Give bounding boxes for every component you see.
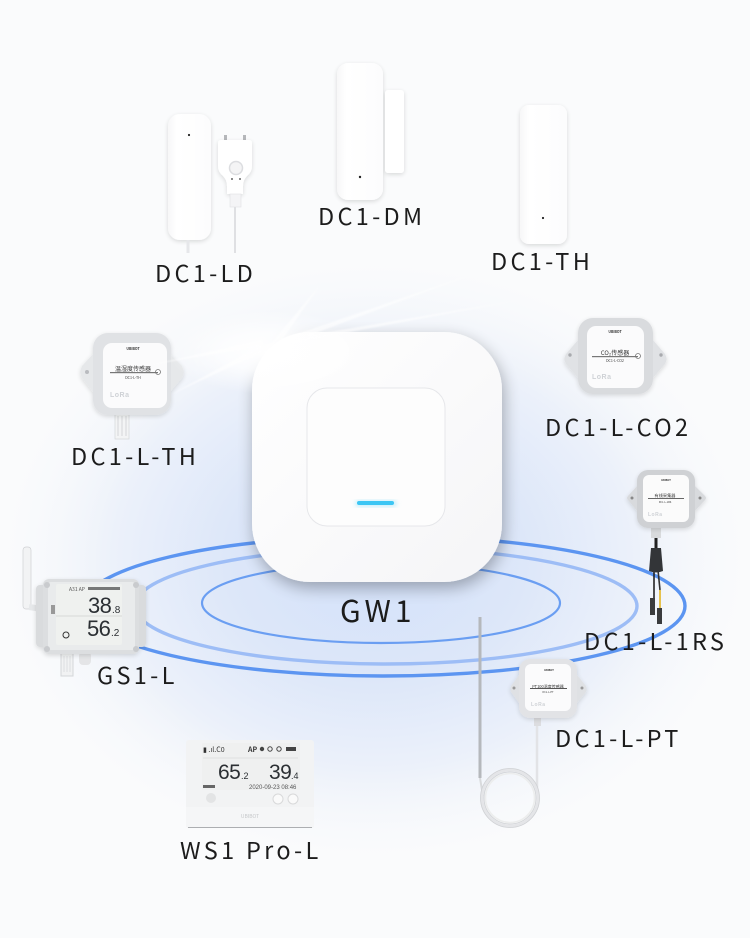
status LEDs: [355, 500, 397, 507]
label: WS1 Pro-L: WS1 Pro-L: [180, 832, 322, 866]
sensor body: [168, 114, 211, 240]
device: WS1 Pro-L: UBIBOT: [241, 813, 259, 820]
label: DC1-LD: DC1-LD: [155, 255, 256, 289]
device: DC1-DM door sensor: [337, 63, 404, 200]
device: DC1-L-CO2: CO₂传感器: [601, 348, 629, 357]
label: DC1-DM: DC1-DM: [318, 198, 425, 232]
cables: [649, 536, 663, 624]
label: GW1: GW1: [340, 587, 416, 631]
device: GS1-L: [23, 547, 146, 676]
device: GS1-L: .2: [111, 628, 120, 639]
device: WS1 Pro-L: [186, 740, 314, 828]
device: DC1-L-CO2: UBIBOT: [608, 330, 622, 335]
label: DC1-L-CO2: DC1-L-CO2: [545, 409, 691, 443]
device: DC1-L-1RS: DC1-L-1RS: [659, 500, 672, 504]
probe with cable: [188, 135, 252, 253]
device: GS1-L: A31 AP: [69, 586, 85, 593]
label: DC1-L-1RS: DC1-L-1RS: [584, 623, 727, 657]
device: DC1-L-1RS: 有线采集器: [655, 492, 676, 499]
device: WS1 Pro-L: 2020-09-23 08:46: [249, 785, 297, 791]
antenna: [23, 547, 42, 609]
gateway body: [252, 332, 502, 582]
signal rings: [83, 536, 685, 676]
device: DC1-L-CO2: [564, 318, 666, 394]
device: DC1-L-PT: DC1-L-PT: [542, 690, 554, 694]
device: DC1-L-PT: LoRa: [531, 702, 546, 708]
probe and coil: [480, 617, 540, 828]
device: GS1-L: 38: [88, 593, 112, 618]
label: GS1-L: GS1-L: [97, 657, 178, 691]
device: GW1 gateway: [252, 332, 502, 582]
device: DC1-L-TH: DC1-L-TH: [125, 376, 141, 381]
label: DC1-L-PT: DC1-L-PT: [555, 720, 682, 754]
device: DC1-L-TH: LoRa: [110, 392, 130, 399]
device: DC1-L-1RS: LoRa: [648, 512, 662, 518]
device: DC1-L-1RS: [627, 470, 706, 624]
device: WS1 Pro-L: .2: [241, 771, 249, 781]
device: DC1-L-CO2: DC1-L-CO2: [606, 359, 624, 364]
device: DC1-L-PT: UBIBOT: [544, 668, 554, 672]
device: DC1-L-CO2: LoRa: [592, 374, 612, 381]
device: DC1-LD leak sensor: [168, 114, 252, 253]
device: DC1-L-PT: [480, 617, 586, 828]
device: WS1 Pro-L: 65: [218, 761, 240, 784]
device: DC1-L-TH: 温湿度传感器: [115, 364, 151, 373]
device: GS1-L: 56: [87, 616, 111, 641]
device: DC1-L-TH: UBIBOT: [126, 347, 140, 352]
device: DC1-L-1RS: UBIBOT: [661, 478, 671, 482]
label: DC1-L-TH: DC1-L-TH: [71, 438, 199, 472]
light flare: [150, 275, 520, 395]
device: DC1-TH sensor: [520, 105, 567, 244]
device: GS1-L: .8: [112, 605, 121, 616]
device: WS1 Pro-L: AP: [247, 745, 257, 755]
gateway inner panel: [307, 388, 445, 526]
device: DC1-L-PT: PT100温度传感器: [532, 683, 564, 690]
device: DC1-L-TH: [80, 333, 184, 439]
label: DC1-TH: DC1-TH: [491, 243, 593, 277]
device: WS1 Pro-L: .4: [291, 771, 299, 781]
device: WS1 Pro-L: 39: [269, 761, 291, 784]
device: WS1 Pro-L: ▮ .ıl.C0: [203, 745, 225, 755]
